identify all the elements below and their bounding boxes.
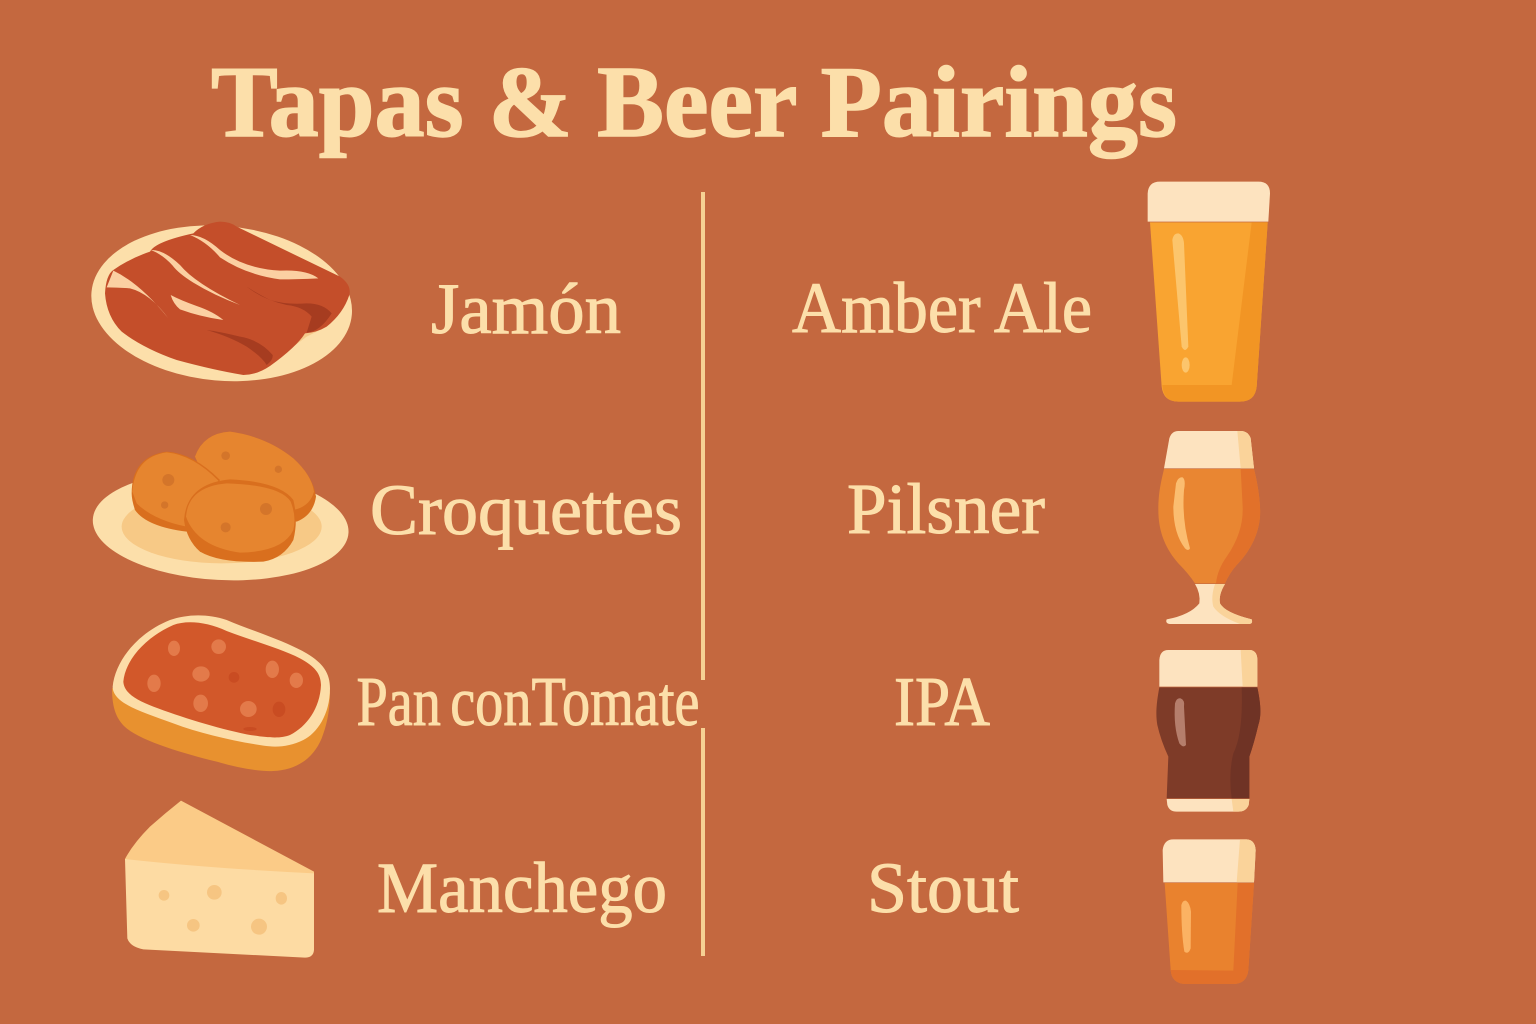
- icon: amber ale glass: [1148, 182, 1270, 402]
- label: Manchego: Manchego: [377, 848, 667, 928]
- label: Jamón: Jamón: [431, 269, 621, 349]
- label: Pan con Tomate: Pan conTomate: [356, 664, 700, 741]
- icon: pan con tomate: [112, 615, 330, 771]
- icon: stout glass: [1163, 839, 1256, 984]
- label: Pilsner: Pilsner: [847, 469, 1045, 549]
- icon: IPA glass: [1156, 650, 1260, 812]
- label: Amber Ale: Amber Ale: [792, 268, 1092, 348]
- icon: pilsner glass: [1158, 431, 1260, 624]
- icon: jamon on plate: [85, 215, 359, 392]
- center divider: [701, 192, 705, 956]
- label: IPA: IPA: [894, 664, 990, 741]
- icon: manchego cheese: [125, 801, 314, 958]
- label: Croquettes: Croquettes: [370, 470, 682, 550]
- title: Tapas & Beer Pairings: [211, 46, 1177, 159]
- icon: croquettes on plate: [90, 432, 351, 587]
- label: Stout: Stout: [867, 848, 1019, 928]
